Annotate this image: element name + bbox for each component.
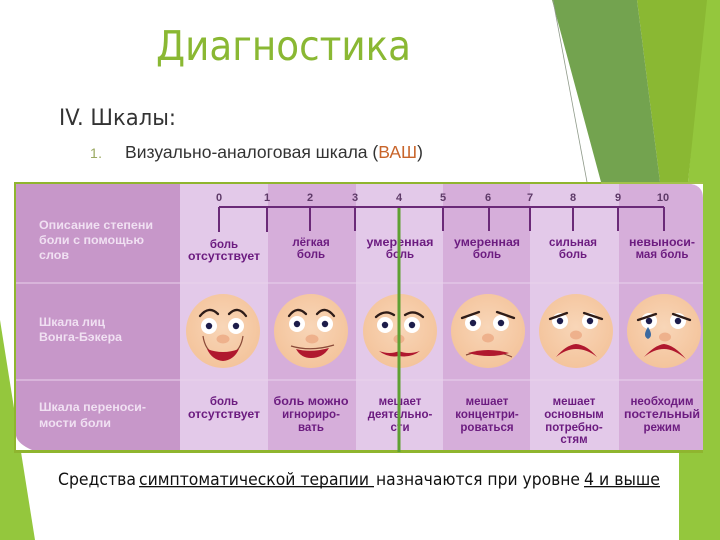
row label: description: Описание степени — [39, 218, 153, 232]
numeric pain scale 0-10: 6 — [485, 192, 491, 204]
verbal descriptions row: боль — [559, 249, 587, 261]
marker line at level 4 — [398, 208, 400, 452]
face 4 — [363, 294, 437, 368]
numeric pain scale 0-10 — [216, 192, 669, 232]
note: therapy threshold: 4 и выше — [584, 470, 660, 490]
tolerance row: игнориро- — [282, 409, 340, 421]
list item: visual analog scale: Визуально-аналоговая шкала (ВАШ) — [125, 142, 423, 162]
tolerance row: боль — [210, 396, 238, 408]
row label: tolerance scale: мости боли — [39, 416, 111, 430]
face 2 — [274, 294, 348, 368]
tolerance row: постельный — [624, 409, 700, 421]
panel: column 9-10 — [619, 184, 703, 450]
tolerance row: концентри- — [455, 409, 519, 421]
panel: column 1-3 — [268, 184, 356, 450]
tolerance row — [188, 396, 700, 446]
numeric pain scale 0-10: 1 — [264, 192, 270, 204]
numeric pain scale 0-10: 8 — [570, 192, 576, 204]
face 8 — [539, 294, 613, 368]
verbal descriptions row: боль — [210, 239, 238, 251]
row label: description: боли с помощью — [39, 233, 144, 247]
panel: column 5-7 — [443, 184, 530, 450]
row label: face scale: Шкала лиц — [39, 315, 106, 329]
tolerance row: стям — [560, 434, 588, 446]
decoration: right green shapes — [552, 0, 720, 540]
chart: pain scale table — [14, 182, 703, 453]
verbal descriptions row — [188, 237, 695, 263]
heading: scales: IV. Шкалы: — [59, 106, 176, 131]
tolerance row: мешает — [553, 396, 596, 408]
numeric pain scale 0-10: 9 — [615, 192, 621, 204]
panel: column 0-1 — [180, 184, 268, 450]
panel: column 3-5 — [356, 184, 443, 450]
numeric pain scale 0-10: 3 — [352, 192, 358, 204]
numeric pain scale 0-10: 2 — [307, 192, 313, 204]
numeric pain scale 0-10: 0 — [216, 192, 222, 204]
tolerance row: мешает — [379, 396, 422, 408]
verbal descriptions row: лёгкая — [292, 237, 330, 249]
row label: tolerance scale — [39, 400, 146, 430]
tolerance row: необходим — [630, 396, 694, 408]
tolerance row: боль можно — [274, 396, 348, 408]
note: therapy threshold: симптоматической терапии — [139, 470, 369, 490]
row label: description — [39, 218, 153, 262]
tolerance row: мешает — [466, 396, 509, 408]
tolerance row: потребно- — [545, 422, 603, 434]
face 10 — [627, 294, 701, 368]
numeric pain scale 0-10: 10 — [657, 192, 669, 204]
verbal descriptions row: сильная — [549, 237, 597, 249]
verbal descriptions row: боль — [386, 249, 414, 261]
verbal descriptions row: умеренная — [366, 237, 434, 249]
tolerance row: деятельно- — [368, 409, 432, 421]
list number: 1. — [90, 145, 102, 161]
panel: row titles column — [16, 184, 180, 450]
tolerance row: отсутствует — [188, 409, 260, 421]
tolerance row: вать — [298, 422, 324, 434]
note: therapy threshold: назначаются при уровне — [376, 470, 580, 490]
note: therapy threshold — [58, 470, 660, 490]
title: Диагностика — [156, 22, 411, 70]
row label: face scale — [39, 315, 122, 344]
verbal descriptions row: мая боль — [636, 249, 688, 261]
tolerance row: роваться — [460, 422, 514, 434]
face 0 — [186, 294, 260, 368]
verbal descriptions row: невыноси- — [629, 237, 695, 249]
verbal descriptions row: отсутствует — [188, 251, 260, 263]
verbal descriptions row: боль — [473, 249, 501, 261]
decoration: left green triangle — [0, 320, 35, 540]
face 6 — [451, 294, 525, 368]
panel: column 7-9 — [530, 184, 619, 450]
verbal descriptions row: боль — [297, 249, 325, 261]
numeric pain scale 0-10: 5 — [440, 192, 446, 204]
tolerance row: сти — [390, 422, 410, 434]
numeric pain scale 0-10: 4 — [396, 192, 403, 204]
row label: description: слов — [39, 248, 69, 262]
verbal descriptions row: умеренная — [454, 237, 520, 249]
numeric pain scale 0-10: 7 — [527, 192, 533, 204]
row label: face scale: Вонга-Бэкера — [39, 330, 122, 344]
note: therapy threshold: Средства — [58, 470, 136, 490]
tolerance row: основным — [544, 409, 604, 421]
row label: tolerance scale: Шкала переноси- — [39, 400, 146, 414]
tolerance row: режим — [644, 422, 680, 434]
